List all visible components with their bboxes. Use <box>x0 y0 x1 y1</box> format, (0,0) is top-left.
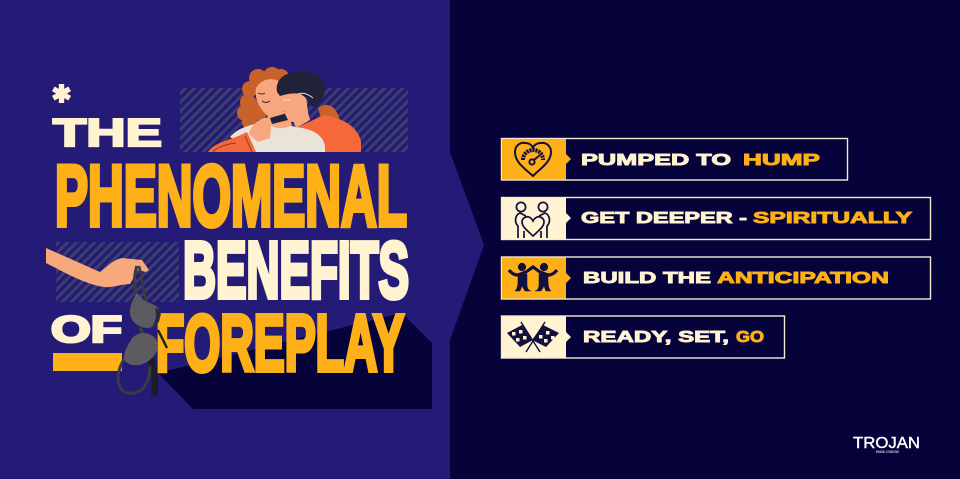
woman's choker <box>270 113 288 124</box>
icon: checkered flags <box>507 322 559 352</box>
man's body <box>296 115 361 152</box>
list item 4: ready set go: GO <box>736 329 764 346</box>
hand <box>46 248 149 287</box>
upper cup <box>130 293 161 328</box>
box <box>502 257 930 299</box>
logo: Trojan: BRAND CONDOMS <box>876 450 900 454</box>
hatched panel: lower <box>56 242 179 302</box>
man's neck <box>292 108 310 128</box>
lower cup <box>124 333 158 365</box>
list item 4: ready set go <box>502 316 784 358</box>
logo: Trojan: TROJAN <box>853 435 920 452</box>
illustration: couple <box>208 67 361 152</box>
label: GET DEEPER - <box>581 210 747 227</box>
word: FOREPLAY: FOREPLAY <box>156 298 404 388</box>
cup connector <box>140 327 143 335</box>
box <box>502 198 930 240</box>
label: BUILD THE <box>583 270 711 287</box>
man's glasses <box>283 93 313 100</box>
icon: two people high five <box>509 263 557 291</box>
background: left panel with arrow <box>0 0 484 479</box>
icon tile <box>502 139 571 180</box>
label: READY, SET, <box>583 329 729 346</box>
label: PUMPED TO <box>581 152 731 169</box>
word: BENEFITS: BENEFITS <box>183 226 409 314</box>
icon tile <box>502 258 571 298</box>
list item 3: build the anticipation <box>502 257 930 299</box>
band loop <box>118 358 150 393</box>
woman's hand <box>249 117 271 142</box>
list item 3: build the anticipation: ANTICIPATION <box>717 270 889 287</box>
box <box>502 138 848 180</box>
man's face <box>281 90 308 122</box>
list item 1: pumped to hump: HUMP <box>743 152 821 169</box>
icon tile <box>502 316 571 358</box>
box <box>502 316 784 358</box>
title block <box>46 67 432 409</box>
icon: heart gauge <box>515 143 551 176</box>
illustration: hand holding bra <box>46 248 167 397</box>
icon tile <box>502 198 571 239</box>
asterisk icon <box>53 84 70 103</box>
list item 2: get deeper spiritually: SPIRITUALLY <box>753 210 913 227</box>
hatched panel: top <box>180 88 408 152</box>
word: OF: OF <box>51 309 122 350</box>
straps <box>135 266 137 296</box>
long shadow behind FOREPLAY <box>158 313 432 409</box>
icon: two people holding heart <box>516 202 549 238</box>
word: THE: THE <box>53 112 162 155</box>
man's curl <box>318 105 340 122</box>
woman's neck <box>264 110 292 136</box>
woman's hair <box>237 67 289 130</box>
list item 2: get deeper spiritually <box>502 198 930 240</box>
woman's sleeve <box>208 132 256 152</box>
yellow bar <box>53 353 122 371</box>
word: PHENOMENAL: PHENOMENAL <box>55 148 407 244</box>
woman's top <box>230 124 325 152</box>
rear band <box>158 330 167 348</box>
woman's face <box>256 79 286 118</box>
list item 1: pumped to hump <box>502 138 848 180</box>
man's hair <box>277 71 325 107</box>
